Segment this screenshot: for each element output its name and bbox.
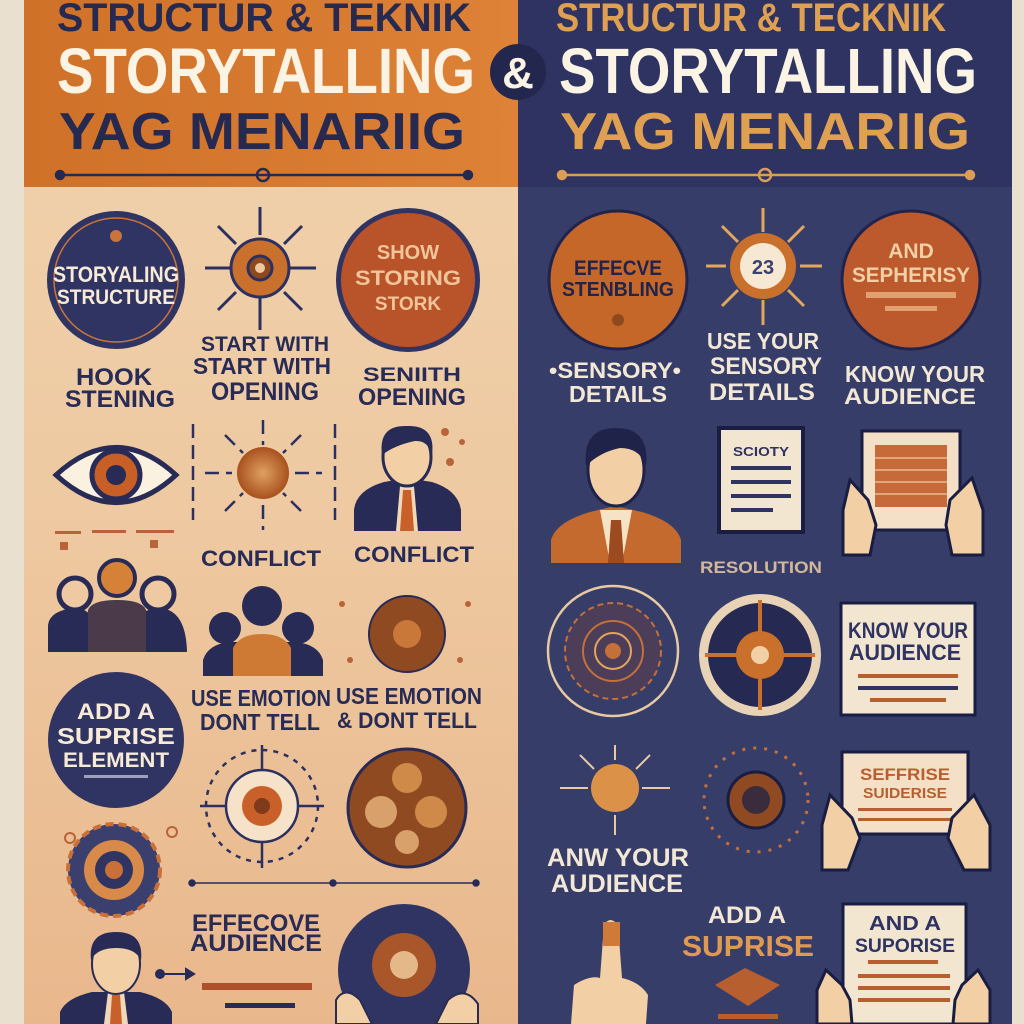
label: use emotion 2: & DONT TELL [337, 708, 477, 733]
label: anw your audience: AUDIENCE [551, 870, 683, 898]
icon: pointing hand [571, 920, 648, 1024]
icon: eye [56, 448, 176, 502]
label: add a surprise: SUPRISE [682, 931, 814, 963]
card: know your audience: KNOW YOUR [848, 618, 968, 643]
label: effective audience: EFFECOVE [192, 910, 320, 937]
icon: document [719, 428, 803, 532]
icon: hands with surprise page: SUIDERISE [863, 785, 947, 802]
label: add a surprise: ADD A [708, 902, 786, 929]
badge: and seperbrisy: AND [888, 240, 934, 263]
label: start with opening: OPENING [211, 378, 319, 406]
card: know your audience [841, 603, 975, 715]
icon: target wheel [200, 745, 324, 868]
label: add a surprise [682, 902, 814, 963]
icon: businessman bottom left [60, 932, 172, 1024]
label: opening: SENIITH [363, 365, 461, 386]
panel: left header band [24, 0, 518, 187]
label: hook [65, 364, 175, 413]
badge: effective storytelling: EFFECVE [574, 257, 662, 280]
icon: hands with surprise page: SEFFRISE [860, 765, 950, 784]
panel: right background [518, 0, 1012, 1024]
label: anw your audience [547, 844, 689, 898]
icon: glowing burst: 23 [752, 257, 774, 279]
title: left: STORYTALLING [57, 35, 475, 107]
badge: show storing story: STORK [375, 294, 441, 315]
icon: target burst [205, 207, 316, 330]
badge: add a surprise element: ELEMENT [63, 749, 169, 772]
label: hook: HOOK [76, 364, 153, 391]
label: know your audience: AUDIENCE [844, 384, 976, 409]
icon: orange-suit man [551, 428, 681, 563]
panel: right header band [518, 0, 1012, 187]
icon: emblem with hands [336, 904, 478, 1024]
label: use your sensory details [707, 328, 822, 406]
divider: lower left [189, 880, 479, 886]
label: sensory details 1: •SENSORY• [549, 358, 681, 383]
label: sensory details 1: DETAILS [569, 381, 667, 407]
label: use emotion 2: USE EMOTION [336, 683, 482, 709]
icon: emblem with three circles [348, 749, 466, 867]
icon: concentric wheel [548, 586, 678, 716]
card: add a surprise: SUPORISE [855, 936, 955, 957]
scattered decoration: left row [55, 428, 465, 550]
header divider: left [56, 169, 472, 181]
title: right: YAG MENARIIG [560, 103, 970, 161]
icon: businessman [354, 426, 461, 531]
label: opening [358, 365, 466, 411]
small caption lines [202, 983, 312, 1008]
badge: show storing story [336, 208, 480, 352]
icon: glowing orb [560, 745, 670, 835]
label: know your audience: KNOW YOUR [845, 361, 985, 387]
icon: round emblem [339, 596, 471, 672]
icon: dotted emblem [704, 748, 808, 852]
icon: hands holding tablet [843, 431, 983, 555]
label: resolution: RESOLUTION [700, 558, 822, 577]
icon: sun burst [193, 420, 335, 530]
badge: show storing story: SHOW [377, 242, 439, 264]
label: use emotion 1 [191, 685, 331, 735]
title: right [556, 0, 977, 161]
label: conflict 1: CONFLICT [201, 546, 322, 571]
icon: three people centre [203, 586, 323, 676]
label: use emotion 1: USE EMOTION [191, 685, 331, 711]
icon: hands with surprise page [822, 752, 990, 870]
badge: storytelling structure: STORYALING [53, 262, 179, 287]
icon: compass wheel [699, 594, 821, 716]
label: start with opening [193, 333, 331, 406]
icon: document: SCIOTY [733, 444, 789, 459]
label: hook: STENING [65, 386, 175, 413]
label: start with opening: START WITH [201, 333, 329, 356]
label: use emotion 2 [336, 683, 482, 733]
card: know your audience: AUDIENCE [849, 640, 961, 665]
icon: glowing burst [706, 208, 822, 325]
card: add a surprise [817, 904, 990, 1024]
label: use your sensory details: USE YOUR [707, 328, 819, 354]
icon: three people left [48, 560, 187, 652]
badge: show storing story: STORING [355, 267, 461, 290]
badge: storytelling structure: STRUCTURE [57, 286, 175, 309]
panel: left background [24, 0, 518, 1024]
title: left: YAG MENARIIG [59, 103, 465, 161]
label: know your audience [844, 361, 985, 409]
label: conflict 2: CONFLICT [354, 542, 475, 567]
badge: and seperbrisy [842, 211, 980, 349]
label: start with opening: START WITH [193, 353, 331, 379]
card: add a surprise: AND A [869, 913, 941, 935]
label: use your sensory details: SENSORY [710, 353, 822, 380]
badge: effective storytelling: STENBLING [562, 279, 674, 301]
badge: effective storytelling [549, 211, 687, 349]
badge: storytelling structure [47, 211, 185, 349]
label: effective audience [190, 910, 322, 957]
badge: add a surprise element: SUPRISE [57, 723, 175, 749]
label: sensory details 1 [549, 358, 681, 407]
label: use emotion 1: DONT TELL [200, 709, 320, 735]
header divider: right [558, 169, 974, 181]
icon: small emblem bottom centre [715, 968, 780, 1019]
icon: gear emblem [65, 824, 177, 916]
ampersand badge [490, 44, 546, 100]
arrow: bottom left [156, 969, 194, 979]
badge: add a surprise element: ADD A [77, 699, 155, 724]
title: left [57, 0, 475, 161]
badge: and seperbrisy: SEPHERISY [852, 264, 970, 287]
label: effective audience: AUDIENCE [190, 930, 322, 957]
badge: add a surprise element [48, 672, 184, 808]
ampersand badge: & [502, 49, 534, 98]
label: anw your audience: ANW YOUR [547, 844, 689, 872]
label: use your sensory details: DETAILS [709, 379, 815, 406]
label: opening: OPENING [358, 384, 466, 411]
